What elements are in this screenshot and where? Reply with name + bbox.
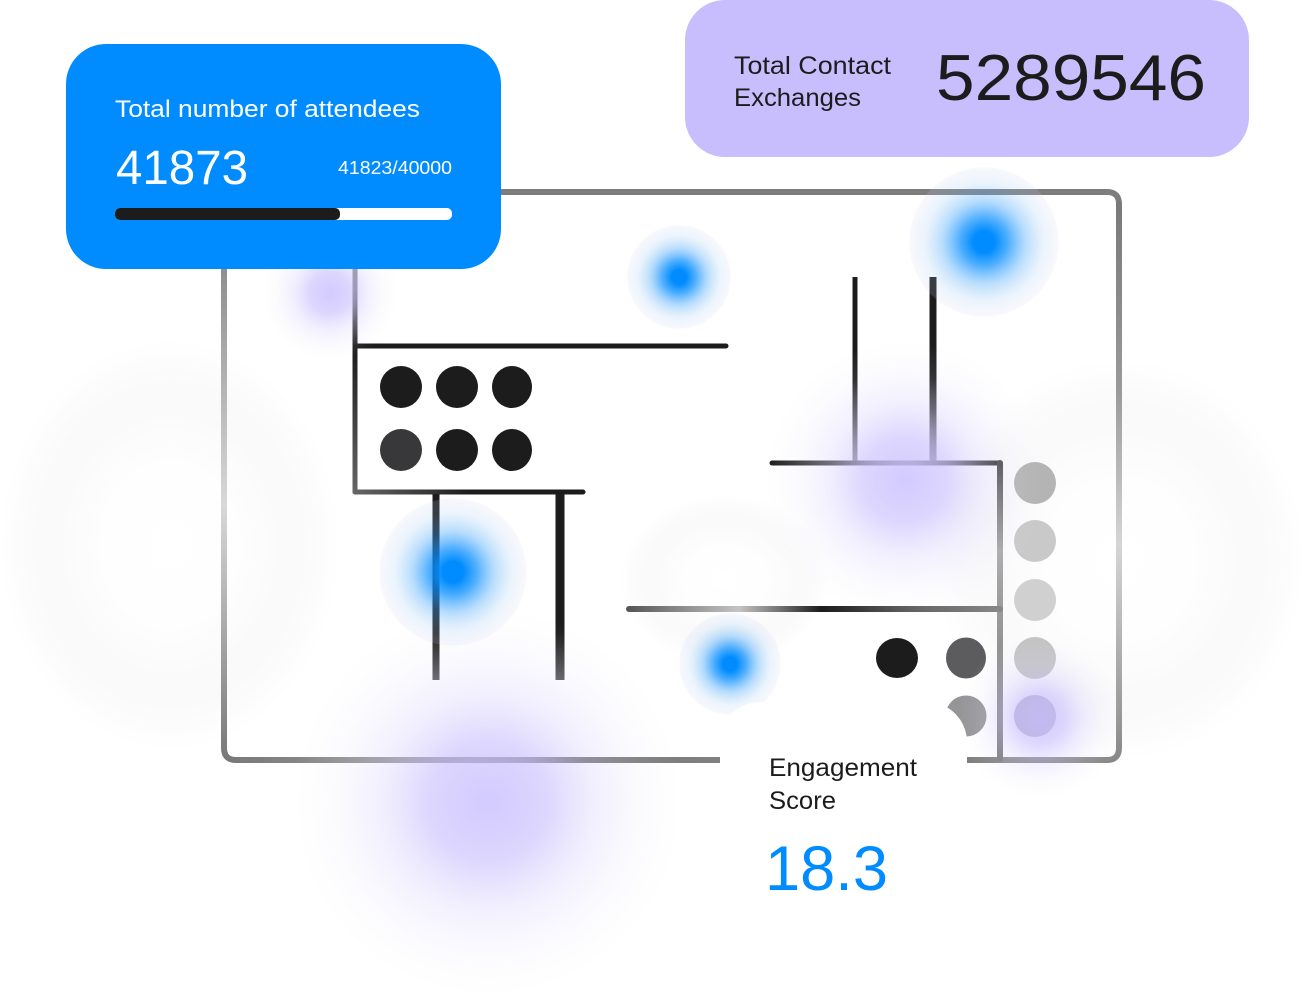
outer frame [224,192,1119,760]
progress bar [115,208,452,220]
engagement label: Score [769,787,836,815]
contact exchanges value: 5289546 [936,41,1206,114]
seats: left room dots [380,366,532,471]
card: engagement score [720,702,967,952]
heat spot: blue bottom center [679,613,781,715]
background glow: gray haze right [935,360,1305,760]
heat spot: blue top center [627,225,731,329]
engagement value: 18.3 [765,834,888,904]
attendees ratio: 41823/40000 [338,158,452,178]
background glow: gray haze center [620,495,830,665]
background glow: gray haze left [0,340,340,750]
attendees label: Total number of attendees [115,96,420,123]
contact exchanges label: Total Contact [734,52,891,80]
engagement label: Engagement [769,754,917,782]
lower left partitions [436,494,560,680]
seats: lower right dots [876,638,986,736]
heat spot: purple center right [765,340,1045,620]
left room walls [355,265,726,492]
heat spot: purple upper left [262,225,398,361]
floor plan walls [224,192,1119,760]
attendees value: 41873 [116,142,248,195]
seats: right column dots [1014,462,1056,737]
contact exchanges label: Exchanges [734,84,861,112]
heat spot: blue top right [909,167,1059,317]
heat spot: blue lower left [379,498,527,646]
right room walls [629,463,1000,758]
card: total number of attendees [66,44,501,269]
card: total contact exchanges [685,0,1249,157]
heat spot: purple bottom [293,607,683,993]
heat spot: purple lower right [958,636,1122,800]
upper right partitions [855,277,933,462]
